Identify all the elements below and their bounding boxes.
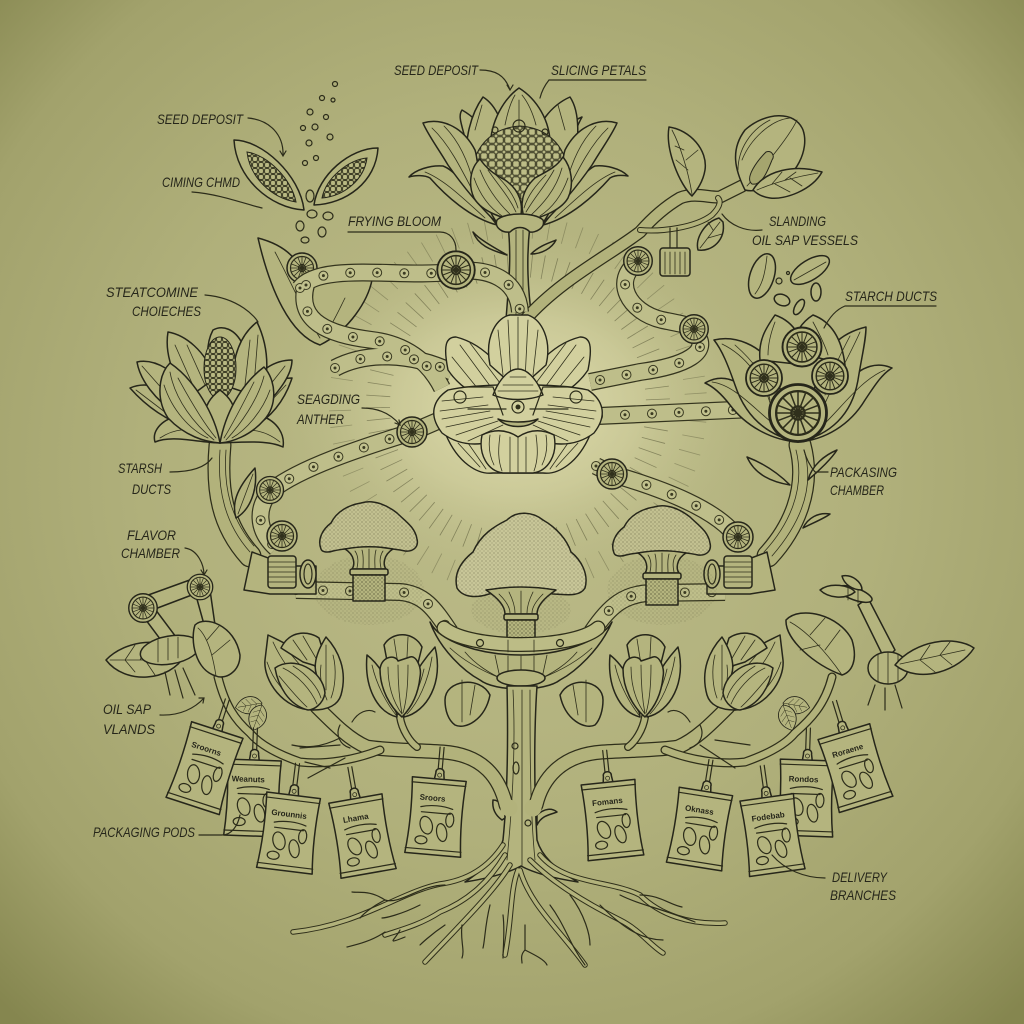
label: starsh ducts: DUCTS (132, 481, 172, 497)
label: seagding anther: ANTHER (296, 411, 344, 427)
tree trunk (465, 686, 578, 882)
upper right branch with leaves and seed pod (525, 116, 822, 320)
central machine flower (434, 315, 602, 473)
label: seed deposit left: SEED DEPOSIT (157, 111, 244, 127)
label: flavor chamber: CHAMBER (121, 545, 180, 561)
hanging snack bags, right: Fodebab (751, 810, 785, 824)
top flower with corn core (409, 88, 628, 232)
hanging snack bags, right: Roraene (831, 742, 865, 760)
belt gears (256, 417, 753, 552)
hanging snack bags, left: Grounnis (271, 808, 308, 821)
label: starsh ducts (118, 458, 212, 497)
label: delivery branches: BRANCHES (830, 887, 897, 903)
open seed pods (234, 140, 378, 210)
hanging snack bags, right: Rondos (788, 774, 819, 784)
tree branches (218, 677, 832, 816)
hanging snack bags, right: Fomans (592, 796, 624, 808)
left mushroom of snack puff (320, 502, 417, 601)
left lower flowers (265, 633, 437, 717)
label: flavor chamber: FLAVOR (127, 527, 176, 543)
label: seed deposit top: SEED DEPOSIT (394, 62, 479, 78)
label: slanding oil sap vessels: SLANDING (769, 213, 826, 229)
left stem (219, 445, 256, 556)
hanging snack bags, left: Lhama (342, 812, 370, 825)
stem of top flower (473, 225, 556, 320)
label: steatcomine choieches: CHOIECHES (132, 303, 202, 319)
label: oil sap vlands (103, 698, 204, 737)
label: steatcomine choieches: STEATCOMINE (106, 284, 199, 300)
label: flavor chamber (121, 527, 207, 575)
label: starch ducts right (824, 288, 938, 328)
label: slanding oil sap vessels: OIL SAP VESSELS (752, 232, 859, 248)
label: seed deposit left (157, 111, 286, 156)
frying bloom gear (437, 251, 475, 289)
label: packasing chamber: PACKASING (830, 464, 897, 480)
label: oil sap vlands: OIL SAP (103, 701, 152, 717)
label: slicing petals: SLICING PETALS (551, 62, 647, 78)
right packaging chamber machine (704, 552, 775, 594)
left robot arm (129, 574, 215, 655)
label: seagding anther: SEAGDING (297, 391, 360, 407)
label: starch ducts right: STARCH DUCTS (845, 288, 938, 304)
left corn flower (130, 322, 292, 447)
small flying bee (820, 576, 874, 606)
central glow and radiating rays (278, 227, 758, 583)
small pods beside trunk (445, 680, 603, 726)
label: packaging pods: PACKAGING PODS (93, 824, 196, 840)
hanging snack bags, left: Weanuts (232, 774, 266, 784)
valve on upper right branch (624, 228, 708, 343)
right flower with gears (705, 315, 892, 442)
hanging snack bags, right (577, 693, 893, 877)
right stem (747, 445, 837, 556)
center mushroom of snack puff (456, 513, 586, 644)
label: packasing chamber: CHAMBER (830, 482, 884, 498)
tree roots (293, 845, 725, 965)
label: ciming chmd (162, 174, 262, 208)
label: frying bloom (348, 213, 456, 250)
label: slicing petals (540, 62, 647, 98)
right mushroom of snack puff (613, 506, 710, 605)
label: slanding oil sap vessels (722, 213, 859, 248)
bowl (430, 622, 612, 689)
label: ciming chmd: CIMING CHMD (162, 174, 240, 190)
hanging snack bags, right: Oknass (684, 803, 715, 817)
label: frying bloom: FRYING BLOOM (348, 213, 441, 229)
left bee with leaf wing (106, 621, 240, 698)
hanging snack bags, left: Sroors (419, 793, 446, 804)
label: starsh ducts: STARSH (118, 460, 163, 476)
label: delivery branches: DELIVERY (832, 869, 888, 885)
right robot arm and bee (858, 598, 974, 710)
label: seed deposit top (394, 62, 513, 90)
label: oil sap vlands: VLANDS (103, 721, 156, 737)
conveyor belts (260, 262, 778, 632)
falling seeds (296, 82, 338, 243)
label: seagding anther (296, 391, 400, 427)
right lower flowers (610, 633, 783, 717)
label: packaging pods (93, 815, 240, 840)
floating chips (743, 250, 834, 316)
label: delivery branches (772, 855, 897, 903)
label: steatcomine choieches (106, 284, 258, 322)
right upper leaf (786, 613, 854, 675)
label: packasing chamber (804, 450, 897, 498)
left tulip receiving seeds (258, 238, 372, 345)
hanging snack bags, left: Sroorns (190, 740, 223, 758)
hanging snack bags, left (166, 691, 470, 878)
stippled dust around puffs (314, 555, 717, 634)
left flavor chamber machine (244, 552, 316, 594)
